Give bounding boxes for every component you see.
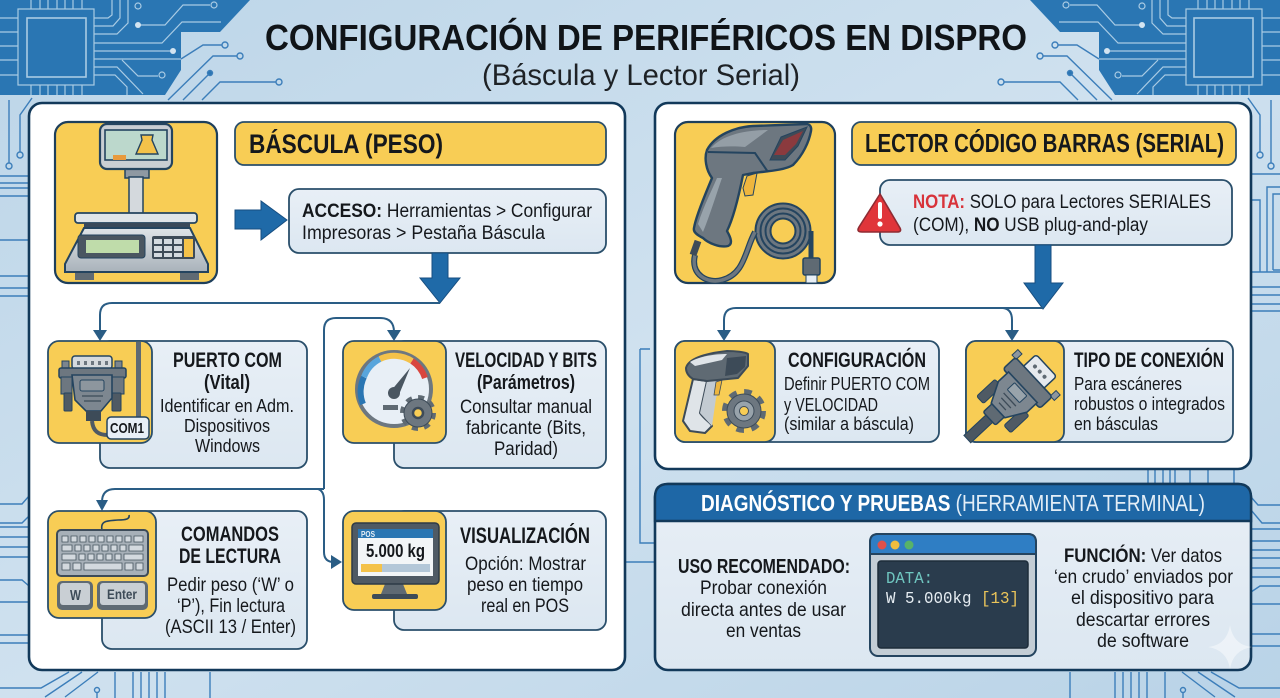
callout: nota <box>858 180 1232 245</box>
icon: serial connector <box>48 341 152 443</box>
callout: nota: (COM), NO USB plug-and-play <box>913 215 1148 236</box>
icon: scale <box>55 122 217 283</box>
card: velocidad y bits <box>343 341 606 468</box>
text block: uso recomendado: directa antes de usar <box>681 599 846 621</box>
icon: terminal window <box>870 534 1036 656</box>
card: visualización: Opción: Mostrar <box>465 554 587 575</box>
background: top left circuit corner <box>0 0 250 95</box>
icon: barcode scanner <box>675 122 835 283</box>
panel: báscula <box>29 103 625 670</box>
card: puerto com <box>48 341 307 468</box>
card: puerto com: Dispositivos <box>184 416 270 436</box>
icon: pos monitor <box>343 511 446 610</box>
heading: báscula: BÁSCULA (PESO) <box>249 128 443 159</box>
connector: to velocidad <box>324 318 401 489</box>
card: comandos de lectura: Pedir peso (‘W’ o <box>167 575 294 596</box>
text block: uso recomendado <box>678 556 850 642</box>
text block: acceso: ACCESO: Herramientas > Configurar <box>302 201 593 222</box>
heading: lector <box>852 122 1236 165</box>
icon: terminal window: W 5.000kg [13] <box>886 590 1019 609</box>
text block: función: FUNCIÓN: Ver datos <box>1064 543 1222 567</box>
icon: terminal window: DATA: <box>886 570 933 589</box>
arrow: to access <box>235 201 287 240</box>
card: puerto com: Windows <box>195 436 260 456</box>
card: velocidad y bits: VELOCIDAD Y BITS <box>455 349 597 372</box>
card: tipo de conexión: Para escáneres <box>1074 374 1182 394</box>
card: tipo de conexión: robustos o integrados <box>1074 394 1225 414</box>
icon: warning <box>858 194 901 232</box>
icon: pos monitor: POS <box>361 530 376 539</box>
card: tipo de conexión <box>946 341 1233 462</box>
card: velocidad y bits: (Parámetros) <box>477 372 575 394</box>
callout: nota: NOTA: SOLO para Lectores SERIALES <box>913 192 1211 213</box>
panel: diagnóstico y pruebas <box>655 484 1251 670</box>
text block: función: de software <box>1097 630 1189 652</box>
text block: uso recomendado: Probar conexión <box>700 577 827 599</box>
key: W: W <box>70 587 82 604</box>
arrow: down from nota <box>1024 245 1063 309</box>
heading: báscula <box>235 122 606 165</box>
text block: función: el dispositivo para <box>1071 587 1214 609</box>
card: configuración: Definir PUERTO COM <box>784 374 930 394</box>
subtitle: (Báscula y Lector Serial) <box>482 59 800 92</box>
card: puerto com: Identificar en Adm. <box>160 396 294 416</box>
icon: scanner and gear <box>675 341 775 442</box>
arrow: down from acceso <box>420 253 460 303</box>
icon: db9 connector <box>946 341 1067 462</box>
text block: acceso: Impresoras > Pestaña Báscula <box>302 223 545 244</box>
card: visualización: real en POS <box>481 596 569 617</box>
card: velocidad y bits: Paridad) <box>494 439 558 460</box>
card: configuración: (similar a báscula) <box>784 414 914 434</box>
background: circuit traces left and bottom <box>0 42 655 698</box>
card: comandos de lectura: ‘P’), Fin lectura <box>177 596 285 617</box>
card: tipo de conexión: TIPO DE CONEXIÓN <box>1074 348 1224 372</box>
card: comandos de lectura: (ASCII 13 / Enter) <box>165 617 296 638</box>
icon: keyboard <box>48 511 156 618</box>
card: comandos de lectura: COMANDOS <box>181 523 279 546</box>
text block: función: descartar errores <box>1076 609 1210 631</box>
icon: gauge and gear <box>343 341 446 443</box>
connector: to configuración and tipo <box>717 308 1043 341</box>
background: circuit traces right <box>1148 174 1280 646</box>
text block: uso recomendado: en ventas <box>726 620 801 642</box>
text block: uso recomendado: USO RECOMENDADO: <box>678 556 850 578</box>
panel header <box>655 484 1251 521</box>
panel: lector código barras <box>655 103 1251 469</box>
text block: función: ‘en crudo’ enviados por <box>1054 566 1233 588</box>
connector: to visualización <box>318 489 342 569</box>
card: configuración: CONFIGURACIÓN <box>788 348 926 372</box>
icon: sparkle watermark <box>1208 625 1252 669</box>
connector: to comandos <box>96 489 324 511</box>
card: puerto com: (Vital) <box>204 372 250 394</box>
card: visualización <box>343 511 606 630</box>
card: comandos de lectura: DE LECTURA <box>179 545 281 568</box>
card: visualización: VISUALIZACIÓN <box>460 523 590 548</box>
card: velocidad y bits: fabricante (Bits, <box>466 418 586 439</box>
background: top right circuit corner <box>998 0 1280 698</box>
key: enter: Enter <box>107 586 137 602</box>
card: visualización: peso en tiempo <box>467 575 583 596</box>
connector: to puerto com <box>93 303 440 341</box>
text block: acceso <box>289 189 606 253</box>
card: velocidad y bits: Consultar manual <box>460 397 592 418</box>
icon: pos monitor: 5.000 kg <box>366 541 425 561</box>
card: puerto com: PUERTO COM <box>173 349 282 372</box>
card: configuración <box>675 341 939 442</box>
card: configuración: y VELOCIDAD <box>784 395 878 415</box>
title: CONFIGURACIÓN DE PERIFÉRICOS EN DISPRO <box>265 16 1027 58</box>
card: comandos de lectura <box>48 511 307 649</box>
card: tipo de conexión: en básculas <box>1074 414 1158 434</box>
text block: función <box>1054 543 1233 652</box>
panel header: DIAGNÓSTICO Y PRUEBAS (HERRAMIENTA TERMINAL) <box>701 489 1205 516</box>
label: com1: COM1 <box>110 420 144 437</box>
